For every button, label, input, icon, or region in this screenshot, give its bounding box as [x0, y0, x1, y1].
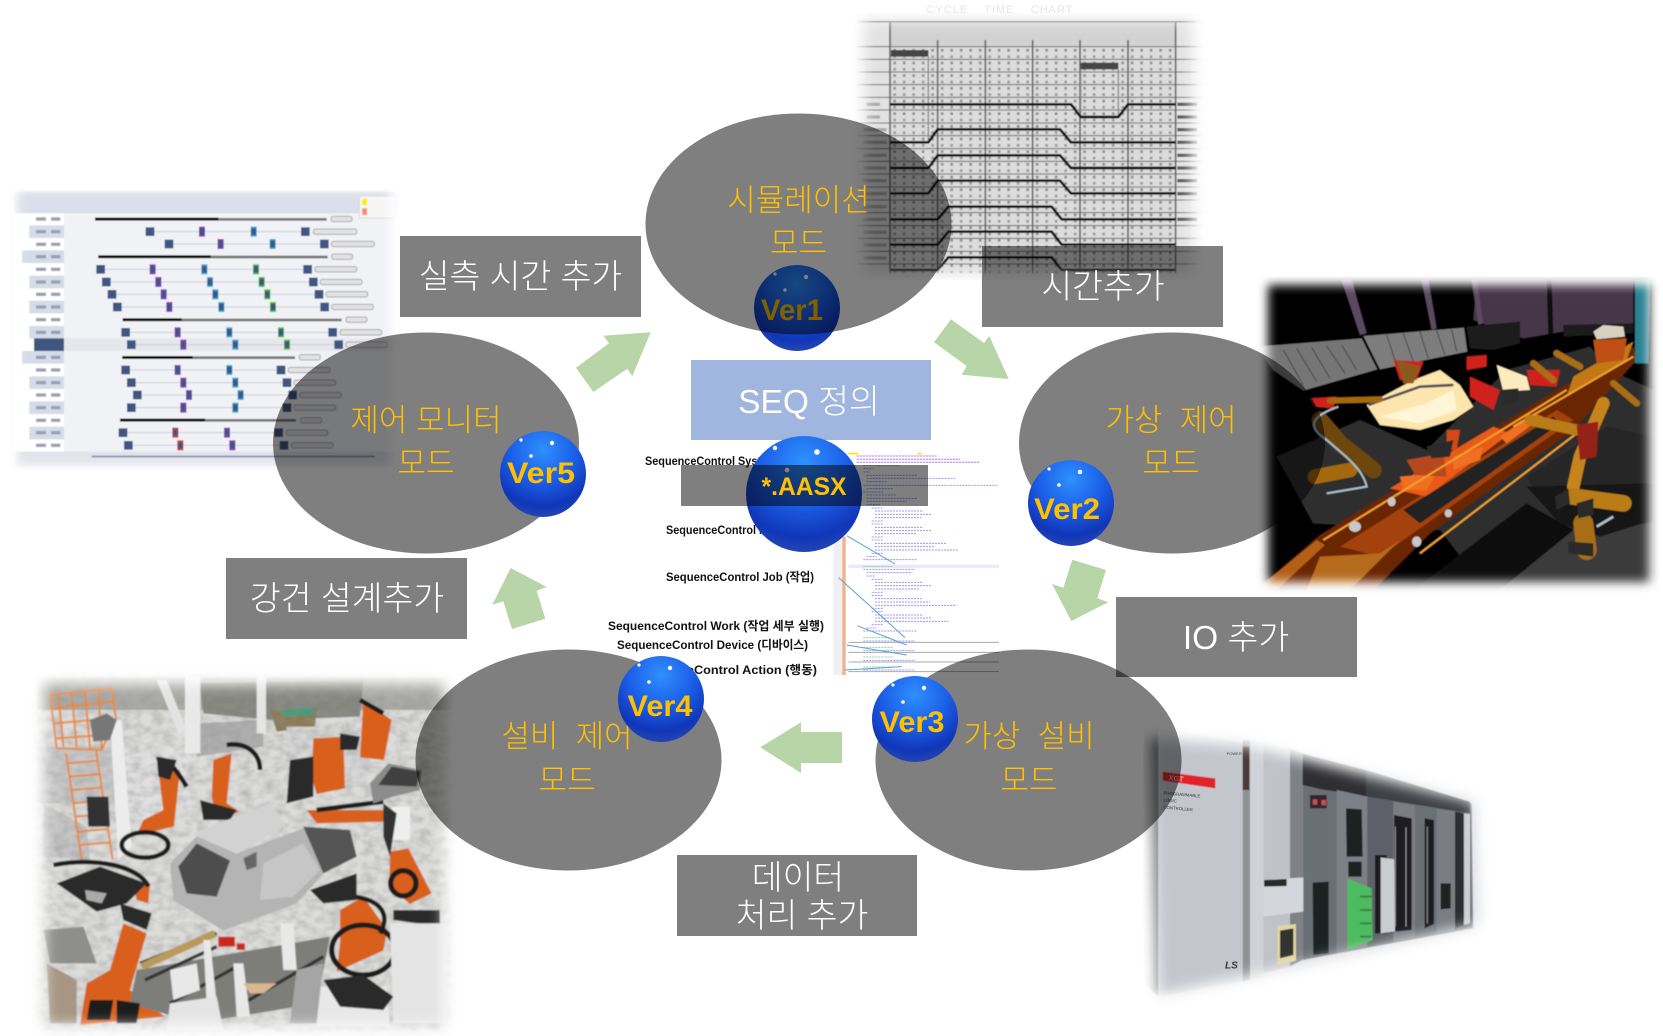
panel: equipment control mode ellipse [416, 650, 722, 870]
icon: Ver4 sphere [618, 656, 704, 742]
text: simulation mode: 시뮬레이션 [727, 183, 870, 218]
text: virtual control mode: 모드 [1142, 446, 1200, 481]
panel: SEQ definition box [691, 360, 931, 440]
icon: Ver5 sphere [500, 431, 586, 517]
text: virtual equipment mode: 모드 [1000, 763, 1058, 798]
arrow: Ver5 to Ver1 [576, 332, 651, 392]
icon: Ver1 sphere: Ver1 [761, 294, 823, 327]
icon: AASX sphere with file label [681, 436, 928, 552]
text: equipment control mode: 설비 제어 [501, 719, 633, 754]
icon: Ver4 sphere: Ver4 [628, 690, 693, 723]
icon: Ver1 sphere [754, 265, 840, 351]
label: data processing added [677, 855, 917, 936]
image: LS XGT PLC hardware [1144, 732, 1483, 998]
arrow: Ver4 to Ver5 [492, 568, 547, 629]
icon: AASX sphere with file label: *.AASX [762, 473, 847, 501]
label: IO added [1116, 597, 1357, 677]
icon: Ver5 sphere: Ver5 [507, 457, 575, 490]
text: control monitor mode: 제어 모니터 [350, 403, 502, 438]
label: robust design added [226, 558, 467, 639]
label: data processing added: 처리 추가 [736, 898, 868, 935]
text: equipment control mode [501, 719, 633, 798]
panel: SEQ definition box: SEQ 정의 [738, 384, 880, 421]
text: control monitor mode [350, 403, 502, 481]
text: controller nameplate: POWER [1227, 751, 1242, 756]
image: cycle time chart [853, 13, 1207, 280]
text: sequence control hierarchy labels: SequenceControl Job (작업) [666, 570, 814, 584]
label: measured time added: 실측 시간 추가 [419, 259, 622, 296]
label: time added: 시간추가 [1041, 269, 1165, 306]
label: data processing added: 데이터 [752, 860, 844, 897]
text: virtual control mode: 가상 제어 [1105, 403, 1237, 438]
text: virtual equipment mode: 가상 설비 [963, 719, 1095, 754]
text: controller nameplate: LS [1225, 960, 1238, 971]
text: controller nameplate: PROGRAMMABLE [1163, 790, 1201, 799]
text: simulation mode: 모드 [770, 226, 827, 261]
text: sequence control hierarchy labels [608, 454, 824, 677]
image: gantt timeline screenshot [10, 190, 404, 470]
label: measured time added [400, 236, 641, 317]
text: controller nameplate: LOGIC [1163, 797, 1177, 804]
panel: control monitor mode ellipse [273, 332, 579, 554]
arrow: Ver1 to Ver2 [934, 319, 1009, 379]
text: equipment control mode: 모드 [538, 763, 596, 798]
text: virtual control mode [1105, 403, 1237, 481]
text: controller nameplate: XGT [1168, 773, 1185, 784]
label: IO added: IO 추가 [1183, 620, 1289, 657]
panel: virtual control mode ellipse [1019, 332, 1325, 554]
arrow: Ver3 to Ver4 [760, 722, 842, 773]
arrow: Ver2 to Ver3 [1052, 560, 1108, 621]
icon: Ver2 sphere [1028, 460, 1114, 546]
label: robust design added: 강건 설계추가 [250, 581, 444, 618]
text: control monitor mode: 모드 [397, 446, 455, 481]
image: virtual robot welding line [1253, 277, 1663, 593]
text: virtual equipment mode [963, 719, 1095, 798]
text: sequence control hierarchy labels: SequenceControl Action (행동) [634, 662, 817, 677]
text: sequence control hierarchy labels: SequenceControl Device (디바이스) [617, 638, 808, 652]
image: AASX XML source listing [833, 453, 999, 675]
panel: simulation mode ellipse [646, 114, 952, 334]
icon: Ver2 sphere: Ver2 [1034, 493, 1100, 526]
text: faded chart title: CYCLE TIME CHART [927, 4, 1073, 16]
icon: Ver3 sphere: Ver3 [880, 706, 944, 739]
text: controller nameplate: CONTROLLER [1163, 805, 1193, 812]
image: factory robots assembling a car [30, 670, 460, 1036]
text: sequence control hierarchy labels: SequenceControl System (시스템) [645, 454, 817, 468]
text: sequence control hierarchy labels: SequenceControl Work (작업 세부 실행) [608, 618, 824, 633]
label: time added [982, 246, 1223, 327]
text: simulation mode [727, 183, 870, 261]
text: controller nameplate [1163, 751, 1242, 971]
panel: virtual equipment mode ellipse [876, 650, 1182, 870]
icon: Ver3 sphere [872, 676, 958, 762]
text: sequence control hierarchy labels: SequenceControl Flow (흐름) [666, 523, 814, 537]
